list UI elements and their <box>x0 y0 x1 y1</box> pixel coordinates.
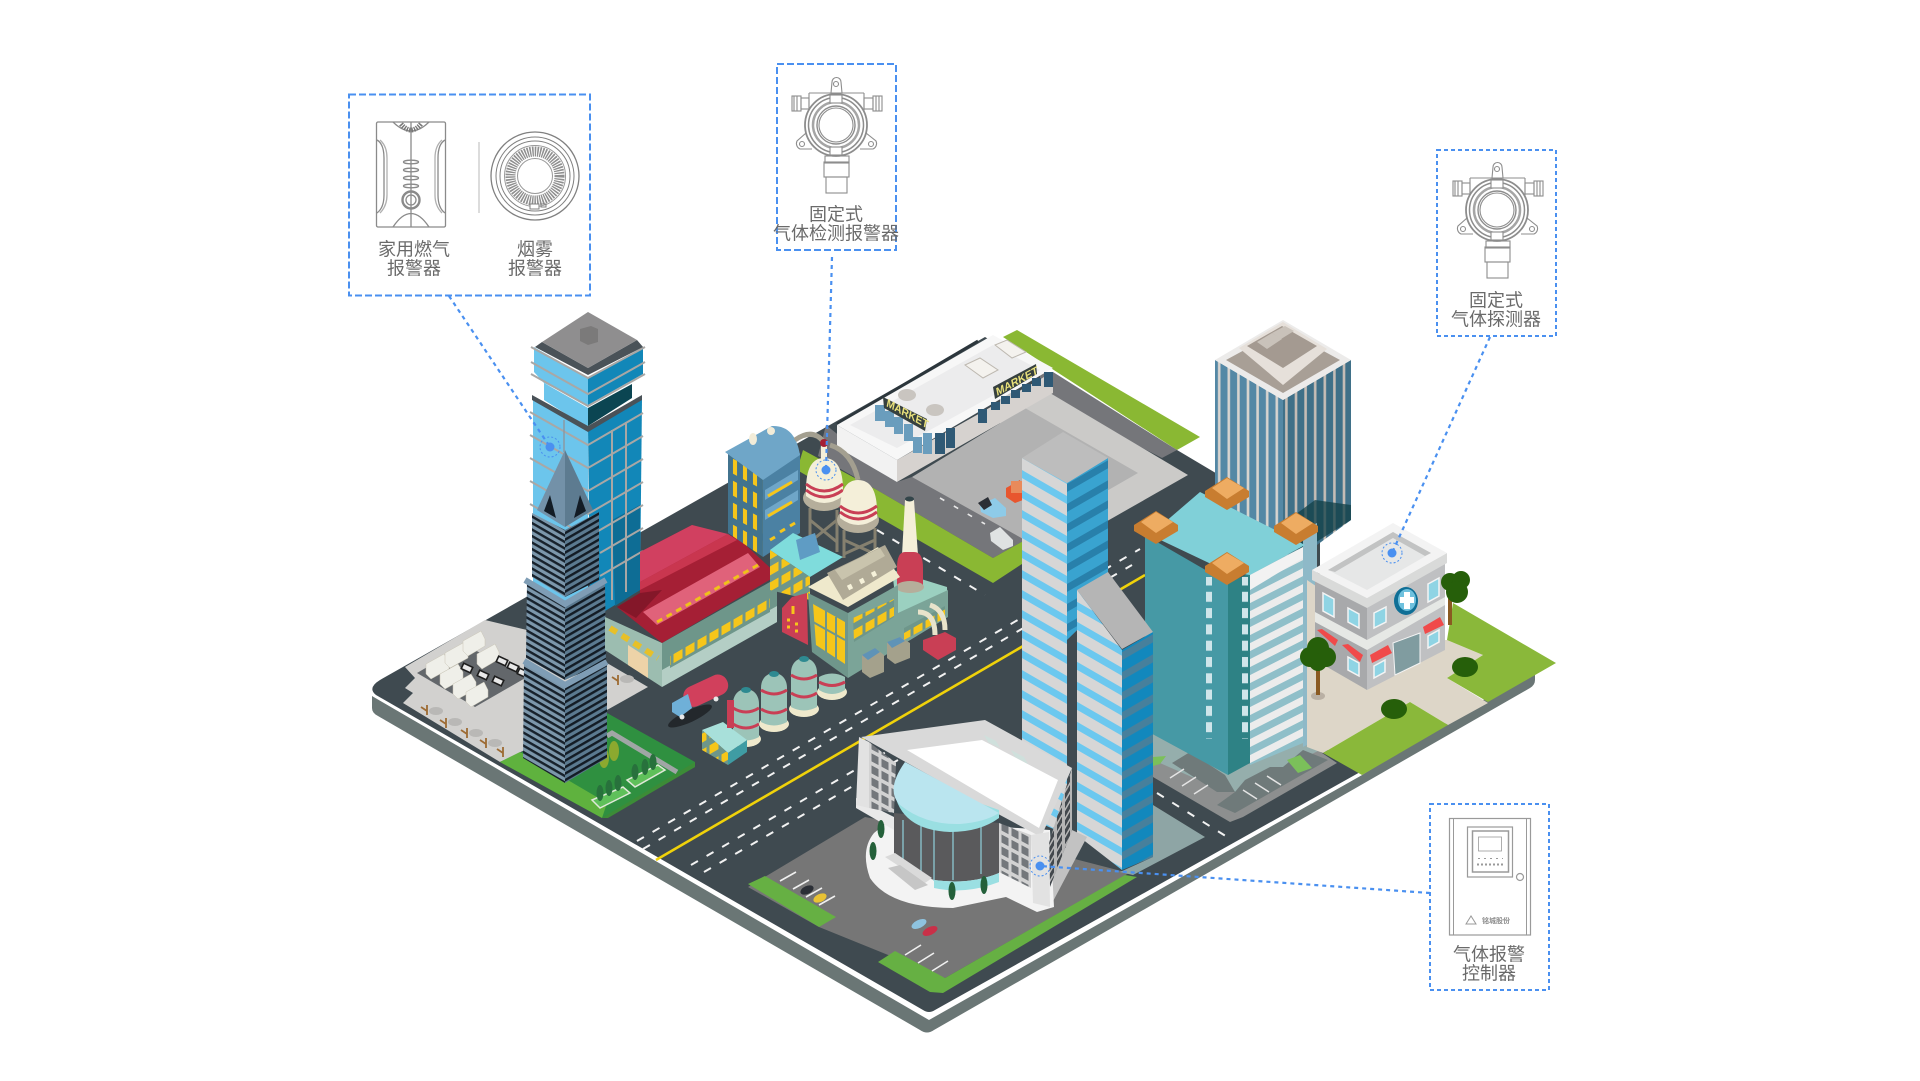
warehouse roof <box>617 525 778 643</box>
connector: detection alarm <box>826 257 832 470</box>
orange truck <box>1006 480 1023 503</box>
tower 1 roof <box>1022 432 1108 483</box>
green strip <box>1003 330 1200 450</box>
orange caps <box>1134 477 1318 585</box>
callout: fixed gas detector <box>1437 150 1556 336</box>
label: 气体检测报警器 <box>773 224 899 244</box>
spire <box>537 450 565 527</box>
callout: home gas and smoke alarms <box>349 94 590 296</box>
section bands <box>524 580 607 685</box>
label: 固定式 <box>1469 290 1523 310</box>
label: 气体报警 <box>1453 944 1525 964</box>
connector: home alarm <box>449 296 550 447</box>
paved lot <box>403 620 648 762</box>
tower body <box>533 400 588 640</box>
tall blue old building <box>725 426 800 557</box>
callout: fixed gas detection alarm <box>773 64 899 250</box>
small windows right <box>1242 577 1248 739</box>
storage tanks <box>702 656 847 765</box>
small plant <box>702 700 747 765</box>
connector lines and markers <box>449 257 1490 893</box>
red machine <box>923 632 956 660</box>
grey plaza <box>1153 733 1337 822</box>
warehouse <box>605 525 778 687</box>
tank 4 <box>817 674 847 700</box>
lower section <box>523 663 565 783</box>
left wall <box>808 593 848 678</box>
hospital grounds <box>1307 580 1556 775</box>
tower roof <box>1215 320 1351 400</box>
factory roof <box>808 547 900 607</box>
water towers <box>795 434 879 558</box>
left tank <box>803 439 845 511</box>
medical cross <box>1394 587 1418 615</box>
ramp wedge <box>1050 830 1087 907</box>
blue car <box>978 497 1006 518</box>
parked cars <box>799 883 939 938</box>
glass rotunda <box>894 813 999 881</box>
market roof <box>837 335 1053 460</box>
bush 2 <box>1381 699 1407 719</box>
dome rim <box>894 775 999 832</box>
tank 3 <box>789 656 819 717</box>
right tank <box>837 480 879 533</box>
street tree 1 <box>1300 637 1336 700</box>
dashed frame <box>777 64 896 250</box>
roof vents <box>898 340 1026 416</box>
tank 2 <box>759 671 789 732</box>
round base <box>866 820 1054 912</box>
platform white edge <box>374 695 1362 1016</box>
fence posts <box>421 675 618 757</box>
label: gas alarm: 家用燃气 <box>378 240 450 260</box>
roof <box>542 312 637 368</box>
garden under tower <box>500 713 695 818</box>
left wall <box>1315 577 1367 690</box>
base platform <box>372 337 1535 1032</box>
front wall <box>728 453 763 557</box>
lower plaza <box>748 805 1205 993</box>
label: smoke alarm: 报警器 <box>508 258 562 278</box>
back office tower <box>1215 320 1351 570</box>
connector: controller <box>1040 866 1430 893</box>
white truck <box>990 527 1013 550</box>
market block <box>797 330 1200 583</box>
callout: gas alarm controller <box>1430 804 1549 990</box>
parking spaces <box>1172 752 1235 792</box>
warehouse windows <box>670 592 770 668</box>
main road markings <box>637 530 1232 872</box>
tower 1 left wall <box>1022 458 1067 835</box>
red annex <box>782 593 808 645</box>
tower 2 left wall <box>1077 590 1122 870</box>
white vans <box>426 631 499 707</box>
pipes <box>795 434 858 480</box>
tower 2 right wall <box>1122 632 1153 870</box>
garden path <box>607 733 677 772</box>
shrubs <box>870 820 988 900</box>
left pillar <box>856 737 869 808</box>
tower dark strip <box>1228 573 1250 775</box>
lane dashes <box>637 530 1232 872</box>
neck <box>544 383 588 428</box>
dashed frame <box>1430 804 1549 990</box>
divider <box>478 142 480 213</box>
garden lawn <box>500 713 695 818</box>
glass dome building <box>856 720 1087 912</box>
market wall <box>837 425 897 482</box>
front lawn <box>797 450 1025 583</box>
yard road dashes <box>940 498 985 524</box>
dashed frame <box>1437 150 1556 336</box>
road surface <box>372 337 1362 1012</box>
street tree 2 <box>1441 571 1470 625</box>
parking yard <box>912 408 1138 557</box>
icon: controller cabinet: 铭城股份 <box>1482 916 1510 925</box>
tower roof <box>1150 492 1305 575</box>
roof <box>725 426 800 480</box>
balconies <box>1250 547 1303 765</box>
marker: dome building <box>1030 856 1050 876</box>
connector: detector <box>1392 337 1490 553</box>
left plinth <box>856 798 896 830</box>
roof rim <box>535 340 643 375</box>
market front road <box>818 425 1025 558</box>
market sign 2: MARKET <box>995 365 1039 399</box>
concrete yard <box>1000 390 1188 528</box>
label: 控制器 <box>1462 964 1516 984</box>
upper windows <box>1323 578 1439 628</box>
twin office tower: left glass tower <box>530 312 645 640</box>
parking grass <box>1287 755 1312 773</box>
left grid wall <box>869 742 896 813</box>
middle section <box>526 583 565 680</box>
warehouse door <box>628 645 648 678</box>
chimney <box>896 496 924 593</box>
icon: controller cabinet <box>1450 818 1530 935</box>
label: smoke alarm: 烟雾 <box>517 240 553 260</box>
roof lights <box>657 565 758 622</box>
planters <box>592 787 630 808</box>
small crates <box>862 648 884 678</box>
market sign 1: MARKET <box>885 397 929 432</box>
side wall <box>763 453 800 557</box>
roof vents <box>984 735 1000 748</box>
right wall <box>1367 560 1445 690</box>
right pillar <box>1031 832 1050 907</box>
front lawn <box>1323 702 1448 775</box>
dark louvred skyscraper <box>523 420 607 783</box>
parking pad <box>417 645 527 707</box>
warehouse walls <box>605 617 662 687</box>
hospital <box>1300 523 1478 719</box>
right wall <box>848 585 948 678</box>
white roof <box>907 740 1058 828</box>
right grid <box>999 823 1031 888</box>
market rear line <box>837 341 978 424</box>
red awnings <box>1317 617 1444 663</box>
roof eaves <box>1312 553 1447 608</box>
marker: hospital <box>1382 543 1402 563</box>
yellow centre line <box>656 575 1145 860</box>
garden trees <box>596 754 656 801</box>
icon: smoke alarm <box>491 132 579 220</box>
icon: gas alarm <box>376 122 446 227</box>
black and white cars <box>461 656 529 686</box>
balconies <box>765 470 798 500</box>
oil truck <box>666 671 731 732</box>
marker: water tower <box>816 460 836 480</box>
tower walls <box>1215 360 1283 570</box>
icon: detector <box>1453 162 1543 278</box>
post shadows <box>429 675 634 747</box>
mid band <box>1315 597 1445 650</box>
tank 1 <box>731 687 761 747</box>
service road <box>1040 372 1177 458</box>
tower 2 roof <box>1077 572 1153 649</box>
sand plaza <box>1307 580 1488 753</box>
market storefront right <box>978 372 1053 423</box>
right tower frame <box>844 528 875 558</box>
market storefront left <box>875 405 932 454</box>
right wall <box>1049 768 1072 887</box>
green strip corner <box>878 875 1137 993</box>
cyan utility building <box>770 533 843 600</box>
marker: skyscraper <box>540 437 560 457</box>
side glass <box>1303 523 1317 747</box>
entrance steps <box>885 853 932 883</box>
parking lines <box>1170 769 1281 799</box>
dashed frame <box>349 94 590 296</box>
tower 1 right wall <box>1067 458 1108 640</box>
door <box>1393 633 1420 675</box>
grey forecourt <box>748 817 1129 978</box>
parking markings <box>780 872 948 971</box>
factory yard <box>892 570 948 620</box>
roof frame <box>861 720 1072 837</box>
green strip left <box>748 876 836 927</box>
icon: detector <box>792 78 882 193</box>
tower left wall <box>1145 535 1228 775</box>
label: 固定式 <box>809 204 863 224</box>
grid lines <box>530 412 643 600</box>
left lot with vans <box>403 620 648 762</box>
upper section <box>532 513 565 597</box>
right lawn <box>1447 603 1556 702</box>
label: gas alarm: 报警器 <box>387 258 441 278</box>
factory <box>782 496 956 678</box>
twin blue towers <box>1022 432 1153 870</box>
teal tower block <box>1134 477 1337 822</box>
left tower frame <box>810 508 837 552</box>
small windows left <box>1206 577 1212 739</box>
roof box <box>580 326 598 345</box>
platform side <box>372 668 1535 1032</box>
roof <box>1312 523 1447 598</box>
bush 1 <box>1452 657 1478 677</box>
top band <box>534 347 588 405</box>
dome roof <box>894 762 999 824</box>
lower windows <box>1348 630 1439 678</box>
label: 气体探测器 <box>1451 310 1541 330</box>
pale side lot <box>1120 805 1205 875</box>
